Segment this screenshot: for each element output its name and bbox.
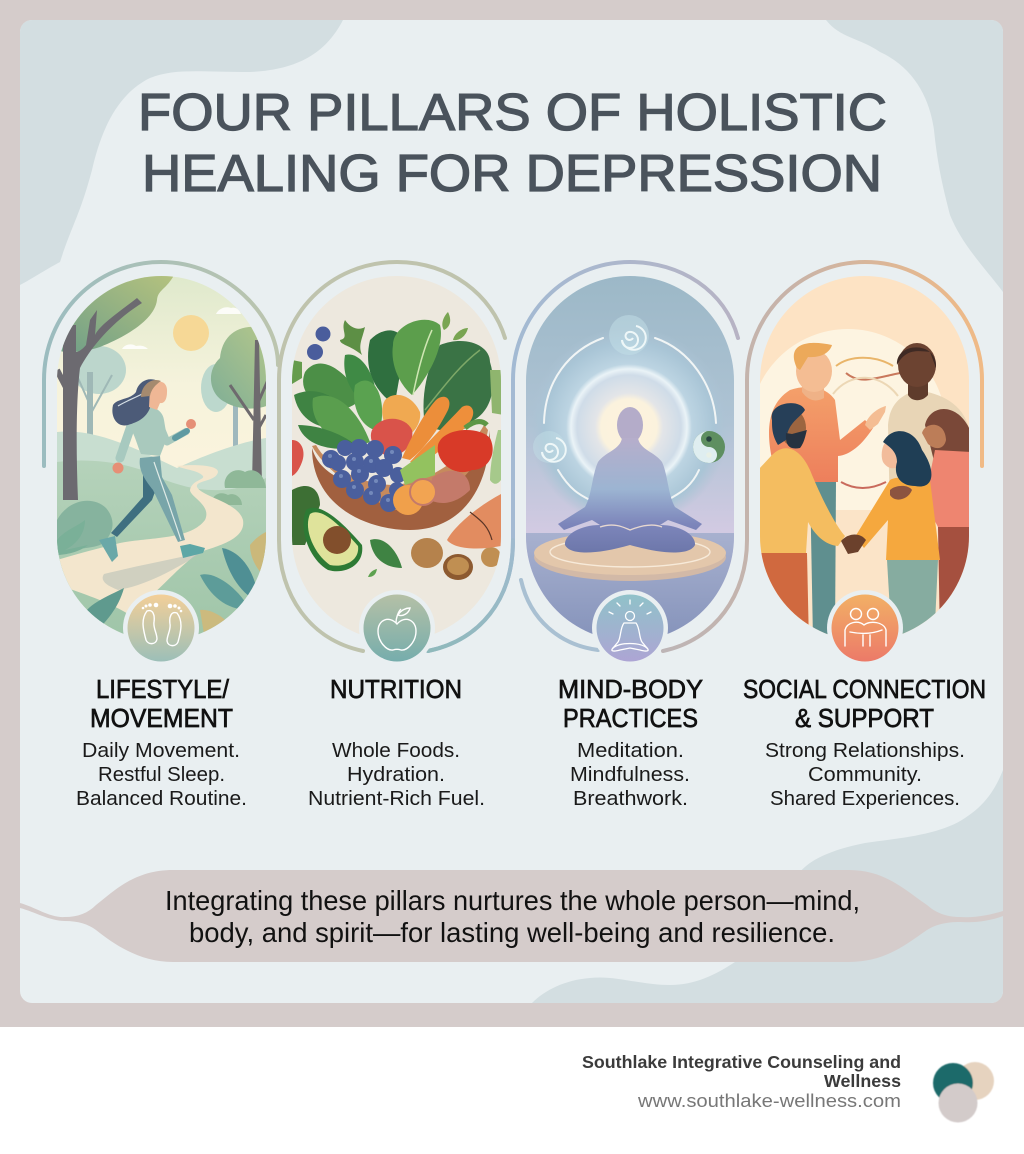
text: social list: Community. bbox=[808, 763, 922, 786]
text: social list: Strong Relationships. bbox=[765, 739, 965, 762]
sweet potato bbox=[447, 494, 501, 548]
hair bbox=[112, 379, 158, 426]
spinach leaves bbox=[303, 364, 355, 408]
path shadow bbox=[102, 554, 198, 590]
person: coral shirt woman bbox=[897, 409, 975, 640]
heading: social connection and support: SOCIAL CONNECTION bbox=[743, 676, 986, 704]
panel: mind-body illustration bbox=[526, 276, 734, 643]
red pepper bbox=[438, 430, 493, 472]
hills bbox=[57, 432, 266, 582]
green apple slice and sweet potato bbox=[400, 445, 435, 485]
text: mind-body list: Breathwork. bbox=[573, 787, 688, 810]
text: nutrition list bbox=[308, 739, 485, 810]
person: orange shirt man bbox=[769, 343, 886, 640]
clouds bbox=[122, 307, 241, 349]
glow rings bbox=[529, 327, 729, 527]
outer arcs around the pillars bbox=[44, 262, 982, 651]
floor bbox=[526, 533, 734, 643]
title: HEALING FOR DEPRESSION bbox=[142, 145, 882, 203]
title bbox=[138, 84, 887, 203]
kale right bbox=[423, 341, 493, 431]
carrots bbox=[402, 397, 449, 460]
text: social list: Shared Experiences. bbox=[770, 787, 960, 810]
heading: lifestyle movement: LIFESTYLE/ bbox=[96, 676, 230, 704]
panel: social illustration bbox=[750, 276, 975, 645]
icon: sun bbox=[173, 315, 209, 351]
spinach leaf bbox=[370, 539, 402, 568]
text: lifestyle list: Balanced Routine. bbox=[76, 787, 247, 810]
front leg bbox=[140, 456, 185, 542]
panel: lifestyle illustration bbox=[57, 274, 275, 641]
heading: mind-body practices bbox=[558, 676, 703, 733]
loose tomato bbox=[292, 440, 304, 476]
person: yellow shirt man bbox=[758, 403, 845, 645]
text: lifestyle list bbox=[76, 739, 247, 810]
person: beige shirt bbox=[888, 343, 968, 520]
shoes bbox=[99, 536, 118, 562]
title: FOUR PILLARS OF HOLISTIC bbox=[138, 84, 887, 142]
big leaf centre bbox=[392, 320, 441, 395]
summary banner: body, and spirit—for lasting well-being and resilience. bbox=[189, 917, 835, 948]
spiral top bbox=[609, 315, 649, 355]
heading: lifestyle movement bbox=[90, 676, 233, 733]
back arm bbox=[120, 420, 133, 458]
panel: nutrition illustration bbox=[292, 276, 504, 641]
walnuts bbox=[411, 538, 443, 568]
text: nutrition list: Nutrient-Rich Fuel. bbox=[308, 787, 485, 810]
face bbox=[149, 382, 167, 410]
light arcs bbox=[544, 338, 716, 500]
text: nutrition list: Hydration. bbox=[347, 763, 445, 786]
icon: meditation badge bbox=[592, 590, 668, 666]
spiral left bbox=[533, 431, 566, 463]
text: mind-body list bbox=[570, 739, 690, 810]
text: mind-body list: Meditation. bbox=[577, 739, 684, 762]
bowl bbox=[312, 430, 490, 530]
text: nutrition list: Whole Foods. bbox=[332, 739, 460, 762]
summary banner bbox=[20, 870, 1003, 962]
back leg bbox=[111, 476, 154, 537]
icon: people hug badge bbox=[827, 590, 903, 666]
footer text bbox=[582, 1052, 901, 1111]
footer text: www.southlake-wellness.com bbox=[637, 1091, 901, 1111]
dark leaf bbox=[368, 330, 400, 398]
floating berries and herbs bbox=[316, 326, 330, 342]
bushes bbox=[212, 470, 266, 505]
yellow pepper bbox=[382, 394, 420, 433]
person: centre woman bbox=[855, 431, 940, 645]
heading: mind-body practices: PRACTICES bbox=[563, 705, 698, 733]
meditating figure bbox=[558, 407, 702, 552]
heading: social connection and support: & SUPPORT bbox=[795, 705, 934, 733]
distant trees bbox=[78, 346, 238, 446]
avocado bbox=[292, 486, 362, 571]
icon: feet badge bbox=[123, 590, 199, 666]
text: mind-body list: Mindfulness. bbox=[570, 763, 690, 786]
heading: lifestyle movement: MOVEMENT bbox=[90, 705, 233, 733]
text: lifestyle list: Daily Movement. bbox=[82, 739, 240, 762]
arrows bbox=[833, 358, 900, 488]
front arm bbox=[160, 425, 187, 442]
footer text: Southlake Integrative Counseling and bbox=[582, 1052, 901, 1072]
logo bbox=[933, 1062, 994, 1122]
text: social list bbox=[765, 739, 965, 810]
right tree bbox=[211, 326, 266, 476]
path bbox=[57, 465, 243, 615]
runner bbox=[99, 379, 205, 562]
tomato bbox=[371, 419, 412, 456]
footer text: Wellness bbox=[824, 1071, 901, 1091]
heading: social connection and support bbox=[743, 676, 986, 733]
blueberries bbox=[322, 439, 404, 512]
heading: nutrition: NUTRITION bbox=[330, 676, 462, 704]
summary banner: Integrating these pillars nurtures the whole person—mind, bbox=[165, 885, 860, 916]
icon: apple badge bbox=[359, 590, 435, 666]
torso bbox=[133, 408, 166, 456]
handshake bbox=[841, 534, 866, 554]
left tree bbox=[57, 274, 173, 500]
platform bbox=[534, 533, 726, 581]
heading: mind-body practices: MIND-BODY bbox=[558, 676, 703, 704]
yin yang bbox=[693, 431, 725, 463]
foreground leaves bbox=[222, 548, 255, 596]
leek bbox=[490, 430, 501, 484]
text: lifestyle list: Restful Sleep. bbox=[98, 763, 225, 786]
